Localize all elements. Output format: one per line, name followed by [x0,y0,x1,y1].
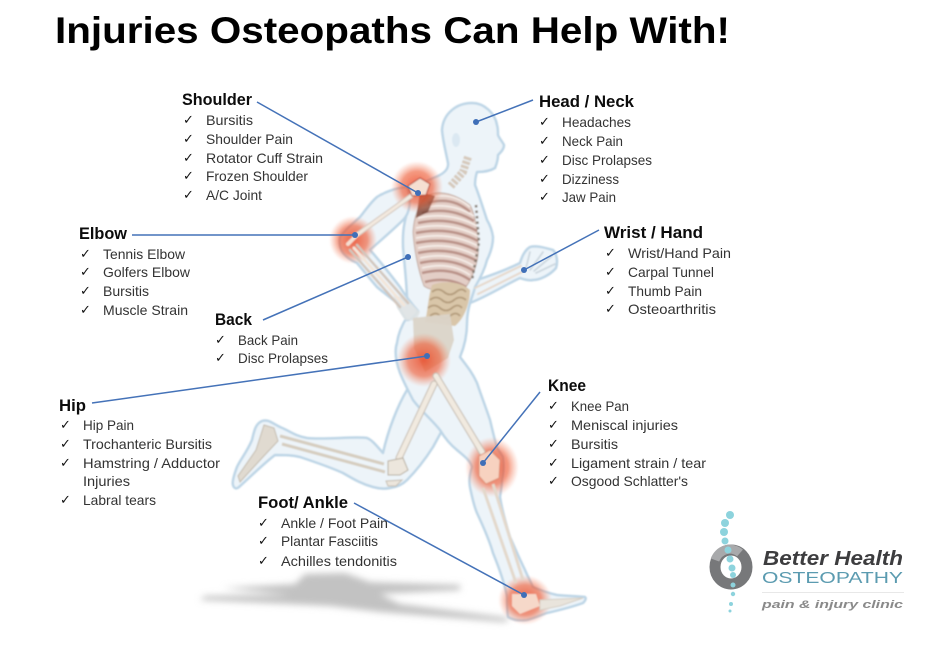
callout: back [263,254,411,320]
text block: shoulder: ✓ [183,151,194,166]
text block: elbow: Bursitis [103,283,149,299]
text block: wrist and hand: Carpal Tunnel [628,264,714,280]
logo: Better Health Osteopathy: Better Health [763,548,903,570]
text block: wrist and hand [604,224,731,317]
text block: wrist and hand: ✓ [605,284,616,299]
ear [452,133,460,147]
text block: shoulder: Shoulder [182,91,253,109]
text block: elbow: Elbow [79,225,127,243]
text block: foot and ankle: Achilles tendonitis [281,553,397,569]
text block: wrist and hand: Wrist / Hand [604,224,703,242]
text block: shoulder: ✓ [183,188,194,203]
text block: foot and ankle: Ankle / Foot Pain [281,515,388,531]
pain glow: shoulder [391,161,443,213]
text block: hip: ✓ [60,418,71,433]
text block: back: ✓ [215,333,226,348]
text block: wrist and hand: ✓ [605,302,616,317]
text block: foot and ankle: Plantar Fasciitis [281,533,378,549]
text block: shoulder: ✓ [183,169,194,184]
text block: elbow: ✓ [80,247,91,262]
leg bones [238,376,583,614]
text block: shoulder: Frozen Shoulder [206,168,308,184]
icon: ring and spine [715,511,747,612]
title: Injuries Osteopaths Can Help With! [55,10,730,51]
text block: back: ✓ [215,351,226,366]
text block: shoulder: Rotator Cuff Strain [206,150,323,166]
text block: hip: ✓ [60,493,71,508]
text block: head and neck: Head / Neck [539,93,635,111]
text block: knee: ✓ [548,418,559,433]
pain glow: hip [397,333,451,387]
logo: Better Health Osteopathy: pain & injury clinic [761,599,903,611]
text block: head and neck: ✓ [539,115,550,130]
text block: elbow: ✓ [80,284,91,299]
callout: wrist [521,230,599,273]
text block: wrist and hand: ✓ [605,246,616,261]
text block: back: Back [215,311,253,329]
text block: knee: ✓ [548,474,559,489]
text block: elbow: Muscle Strain [103,302,188,318]
text block: head and neck: Disc Prolapses [562,152,652,168]
text block: hip [59,397,220,508]
text block: foot and ankle: ✓ [258,516,269,531]
pain glow: foot [498,575,552,625]
neck vertebrae [450,157,468,187]
callout: knee [480,392,540,466]
text block: foot and ankle: ✓ [258,554,269,569]
text block: hip: ✓ [60,456,71,471]
text block: hip: Trochanteric Bursitis [83,436,212,452]
ground shadow [200,573,510,622]
text block: shoulder: ✓ [183,113,194,128]
runner figure [233,103,586,625]
near arm [340,187,418,320]
pain glow: knee [465,437,519,497]
text block: knee: ✓ [548,399,559,414]
far arm [470,246,557,303]
intestines and pelvis [413,282,470,372]
text block: back: Back Pain [238,332,298,348]
text block: knee: Meniscal injuries [571,417,678,433]
text block: back: Disc Prolapses [238,350,328,366]
text block: head and neck: ✓ [539,134,550,149]
text block: foot and ankle [258,494,397,569]
text block: back [215,311,328,366]
text block: hip: Hip [59,397,86,415]
callout: hip [92,353,430,403]
callout: foot [354,503,527,598]
text block: head and neck: Jaw Pain [562,189,616,205]
text block: hip: Hamstring / Adductor [83,455,220,471]
text block: head and neck: Neck Pain [562,133,623,149]
text block: knee: Osgood Schlatter's [571,473,688,489]
text block: knee: ✓ [548,437,559,452]
text block: knee: Knee [548,377,586,395]
text block: wrist and hand: Osteoarthritis [628,301,716,317]
callout: head [473,100,533,125]
text block: elbow [79,225,191,318]
ribcage [413,192,479,291]
text block: head and neck: ✓ [539,190,550,205]
text block: head and neck: Dizziness [562,171,619,187]
logo: Better Health Osteopathy [715,511,904,612]
text block: head and neck: ✓ [539,172,550,187]
near hand [393,294,420,321]
text block: wrist and hand: ✓ [605,265,616,280]
text block: shoulder: Shoulder Pain [206,131,293,147]
callout: shoulder [257,102,421,196]
text block: shoulder [182,91,323,203]
pain glow: elbow [329,216,377,264]
text block: shoulder: A/C Joint [206,187,262,203]
text block: elbow: Tennis Elbow [103,246,186,262]
text block: foot and ankle: ✓ [258,534,269,549]
rear leg [233,390,445,489]
text block: knee [548,377,706,489]
text block: foot and ankle: Foot/ Ankle [258,494,348,512]
text block: hip: ✓ [60,437,71,452]
text block: head and neck: ✓ [539,153,550,168]
text block: hip: Labral tears [83,492,156,508]
logo: Better Health Osteopathy: OSTEOPATHY [762,570,903,587]
text block: elbow: ✓ [80,265,91,280]
text block: elbow: Golfers Elbow [103,264,191,280]
torso and front leg [396,103,586,620]
text block: wrist and hand: Thumb Pain [628,283,702,299]
text block: knee: Knee Pan [571,398,629,414]
text block: hip: Injuries [83,473,130,489]
text block: hip: Hip Pain [83,417,134,433]
text block: head and neck: Headaches [562,114,631,130]
text block: shoulder: ✓ [183,132,194,147]
text block: knee: Ligament strain / tear [571,455,706,471]
arm bones [348,178,555,307]
text block: shoulder: Bursitis [206,112,253,128]
callout lines [92,100,599,598]
text block: knee: Bursitis [571,436,618,452]
text block: head and neck [539,93,652,205]
callout: elbow [132,232,358,238]
text block: elbow: ✓ [80,303,91,318]
text block: wrist and hand: Wrist/Hand Pain [628,245,731,261]
text block: knee: ✓ [548,456,559,471]
